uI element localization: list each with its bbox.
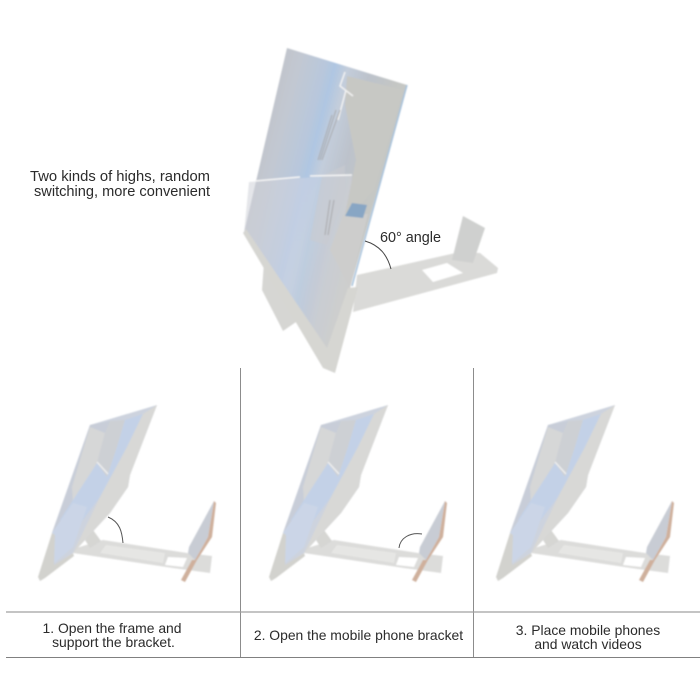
caption: step 1: 1. Open the frame and <box>42 620 182 636</box>
main product image: magnifier on stand <box>243 48 498 373</box>
table rules <box>240 368 474 657</box>
device image: step 3 <box>496 405 674 582</box>
heading text: two kinds of highs: switching, more convenient <box>34 184 210 200</box>
lens reflection right <box>345 76 403 215</box>
phone arm base <box>353 252 498 312</box>
angle callout: 60 degree: 60° angle <box>380 230 441 246</box>
caption: step 3: 3. Place mobile phones <box>516 622 660 638</box>
front frame <box>243 229 358 373</box>
caption: step 1: support the bracket. <box>52 634 175 650</box>
caption: step 3 <box>516 622 660 652</box>
heading text: two kinds of highs <box>30 169 210 200</box>
heading text: two kinds of highs: Two kinds of highs, random <box>30 169 210 185</box>
cable arc: step 2 <box>399 534 422 548</box>
highlight streaks <box>255 175 352 181</box>
device image: step 1 <box>38 405 216 582</box>
lens <box>244 48 407 349</box>
rear support leg <box>262 262 296 331</box>
caption: step 3: and watch videos <box>534 636 642 652</box>
right blue edge <box>352 85 407 286</box>
device image: step 2 <box>269 405 447 582</box>
phone bracket <box>452 216 485 263</box>
lower lens <box>244 176 352 349</box>
angle callout: 60 degree <box>365 230 441 269</box>
caption: step 1 <box>42 620 182 650</box>
caption: step 2: 2. Open the mobile phone bracket <box>254 627 463 643</box>
cable arc: step 1 <box>108 517 123 543</box>
